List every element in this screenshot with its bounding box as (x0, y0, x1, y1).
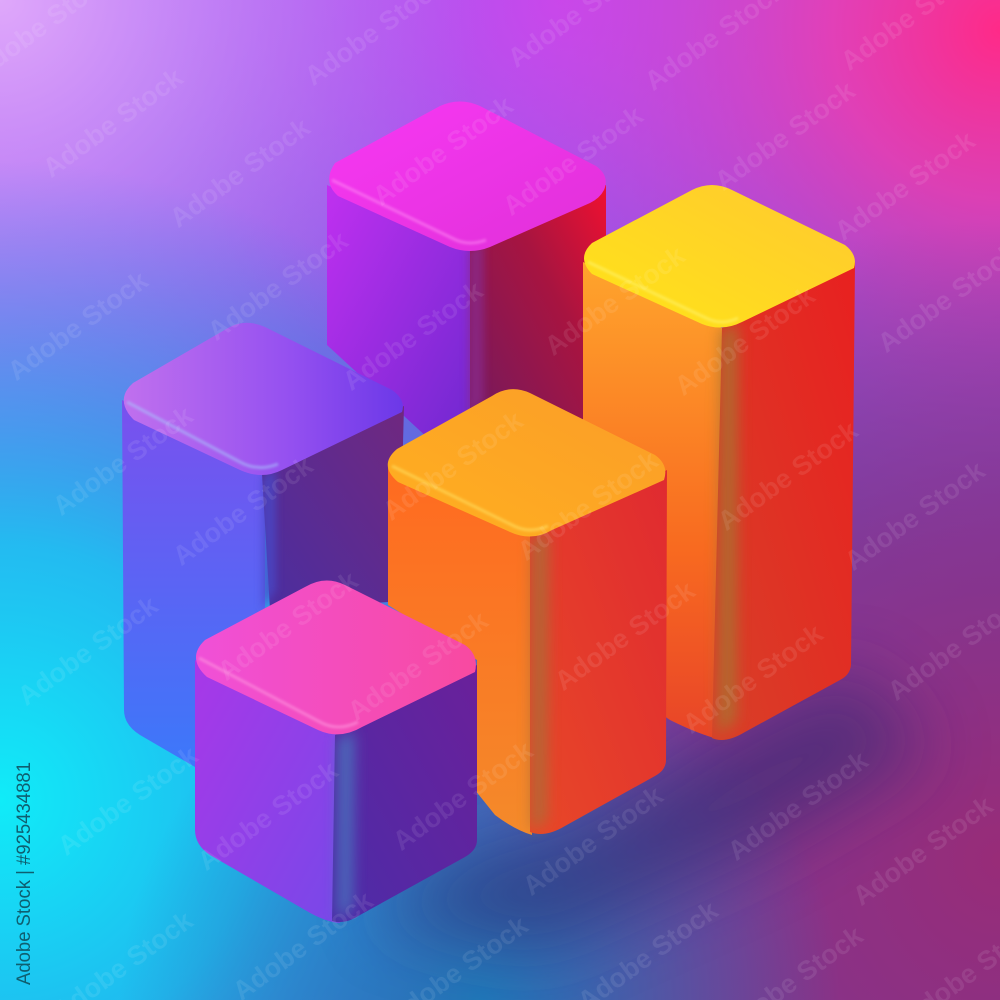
watermark pattern: Adobe Stock (829, 125, 981, 246)
bar: orange middle (388, 389, 667, 835)
watermark pattern: Adobe Stock (839, 455, 991, 576)
watermark pattern: Adobe Stock (337, 275, 489, 396)
watermark pattern: Adobe Stock (512, 445, 664, 566)
watermark pattern: Adobe Stock (712, 415, 864, 536)
stock credit text: Adobe Stock | #925434881 (13, 762, 35, 985)
yellow top face (584, 185, 855, 328)
pink top face (196, 580, 476, 734)
pink left face (195, 660, 340, 923)
watermark pattern: Adobe Stock (192, 755, 344, 876)
watermark pattern: Adobe Stock (342, 605, 494, 726)
watermark pattern: Adobe Stock (722, 745, 874, 866)
magenta left face (327, 185, 470, 440)
watermark pattern: Adobe Stock (517, 780, 669, 901)
watermark pattern: Adobe Stock (37, 62, 189, 183)
watermark pattern: Adobe Stock (539, 240, 691, 361)
orange top face (388, 389, 665, 537)
watermark pattern: Adobe Stock (367, 90, 519, 211)
watermark pattern: Adobe Stock (52, 740, 204, 861)
magenta top face (329, 102, 606, 251)
orange left face (388, 465, 532, 835)
watermark pattern: Adobe Stock (497, 100, 649, 221)
watermark pattern: Adobe Stock (377, 405, 529, 526)
watermark pattern: Adobe Stock (12, 590, 164, 711)
watermark pattern: Adobe Stock (167, 450, 319, 571)
watermark pattern: Adobe Stock (2, 265, 154, 386)
bar: pink front (195, 580, 477, 923)
watermark pattern: Adobe Stock (387, 735, 539, 856)
magenta right face (470, 185, 606, 440)
blue left face (122, 400, 265, 767)
watermark pattern: Adobe Stock (709, 75, 861, 196)
watermark pattern: Adobe Stock (847, 790, 999, 911)
yellow right face (712, 262, 855, 740)
watermark pattern: Adobe Stock (677, 618, 829, 739)
watermark pattern: Adobe Stock (202, 225, 354, 346)
bar: yellow tall (583, 185, 855, 740)
watermark pattern: Adobe Stock (549, 575, 701, 696)
orange right face (530, 470, 667, 834)
yellow left face (583, 262, 722, 740)
watermark pattern: Adobe Stock (212, 565, 364, 686)
blue top face (124, 323, 403, 475)
bar: blue left (122, 323, 404, 767)
watermark pattern: Adobe Stock (669, 280, 821, 401)
watermark pattern: Adobe Stock (164, 112, 316, 233)
watermark pattern: Adobe Stock (47, 400, 199, 521)
cast shadow on floor (370, 670, 930, 950)
pink right face (332, 665, 477, 922)
blue right face (262, 406, 404, 610)
bar: magenta back (327, 102, 606, 440)
